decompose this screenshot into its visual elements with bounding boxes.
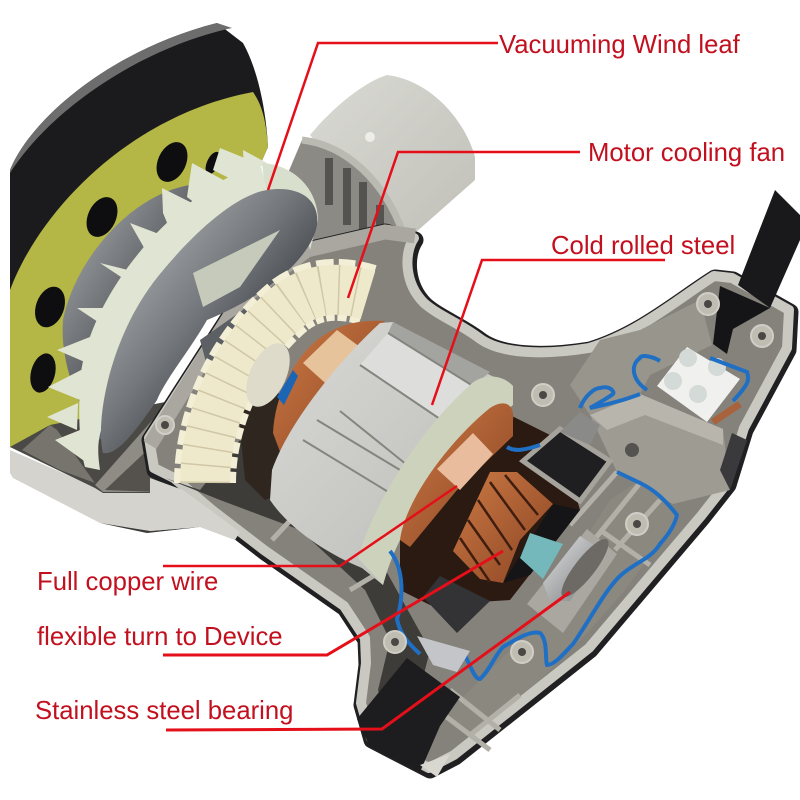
rear copper winding (273, 321, 385, 465)
vacuuming wind leaf (47, 148, 318, 470)
label: Motor cooling fan (348, 139, 785, 298)
stator end flange (358, 376, 513, 585)
silver capacitor (417, 636, 470, 672)
sanding pad (10, 23, 268, 460)
label: Full copper wire (37, 486, 457, 596)
label: Cold rolled steel (432, 232, 735, 405)
cold rolled steel stator (270, 322, 513, 585)
armature shaft (520, 533, 563, 579)
lower brush holder (423, 576, 490, 633)
label: Stainless steel bearing (35, 592, 570, 730)
label: Full copper wire: Full copper wire (37, 568, 218, 596)
copper lead near terminal (713, 404, 740, 422)
label: Vacuuming Wind leaf (268, 31, 741, 190)
power cord (713, 190, 800, 354)
motor cooling fan (205, 290, 368, 483)
motor housing shell (149, 230, 790, 770)
stainless steel bearing (527, 529, 617, 633)
front copper winding (400, 403, 513, 547)
black switch (357, 658, 460, 777)
label: flexible turn to Device (37, 551, 503, 655)
impeller blades (47, 148, 267, 463)
vacuum tube (285, 75, 475, 250)
brush holder upper (523, 412, 610, 501)
label: flexible turn to Device: flexible turn to Device (37, 623, 283, 651)
cavity shadow behind fan (235, 380, 300, 500)
blue wires (390, 356, 748, 679)
cavity shadow behind winding (400, 410, 580, 605)
terminal block (657, 347, 740, 422)
label: Vacuuming Wind leaf: Vacuuming Wind leaf (499, 31, 741, 59)
label: Cold rolled steel: Cold rolled steel (551, 232, 735, 260)
copper commutator (453, 472, 580, 583)
label: Motor cooling fan: Motor cooling fan (588, 139, 785, 167)
screw posts (156, 293, 773, 663)
label: Stainless steel bearing: Stainless steel bearing (35, 697, 293, 725)
pad holes (26, 137, 224, 395)
left housing lobe (10, 350, 300, 545)
side clip (720, 433, 747, 490)
